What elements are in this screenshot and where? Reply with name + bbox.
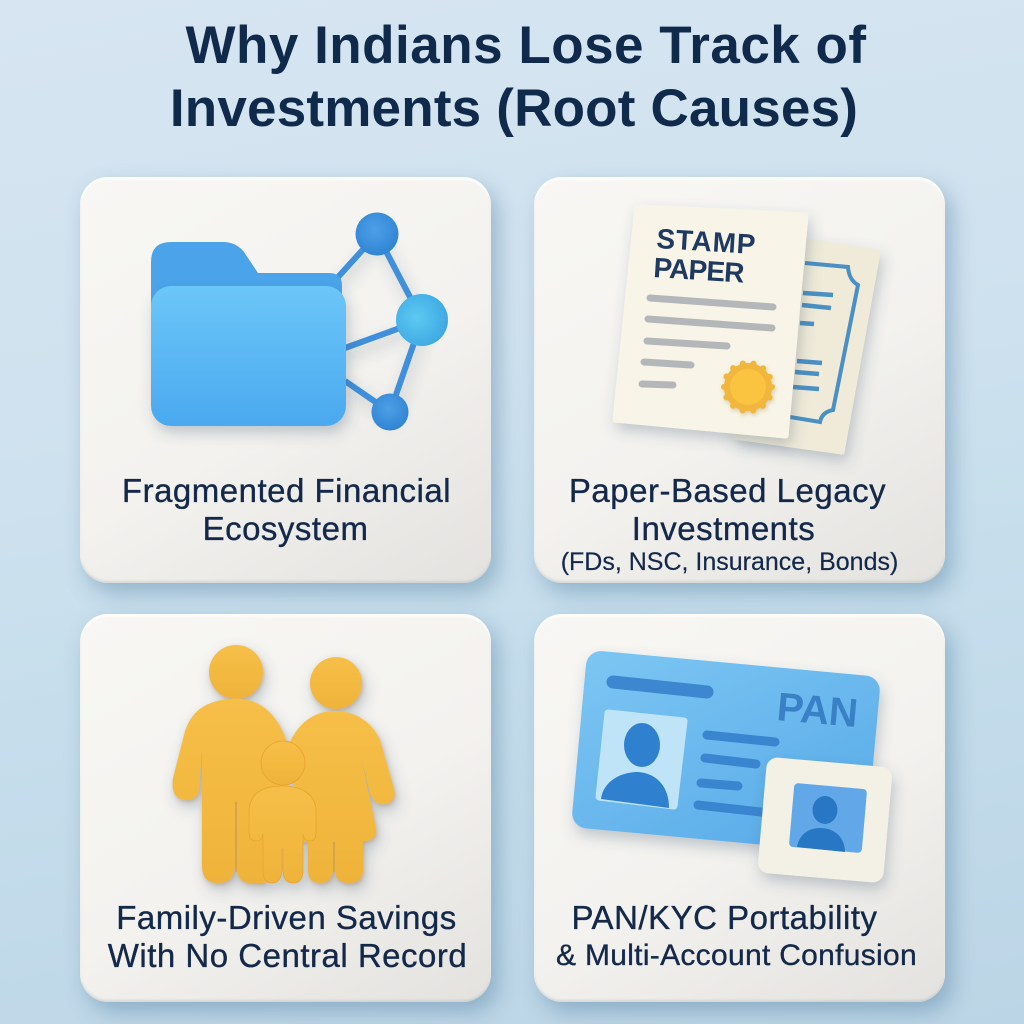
icon: stamp paper documents [615,207,878,452]
title [170,16,867,138]
title: Why Indians Lose Track of [185,16,867,75]
stamp paper label: PAPER [653,252,745,289]
caption: paper: Investments [632,510,815,547]
caption: fragmented [122,472,451,548]
icon: PAN card [571,650,893,883]
caption: family: Family-Driven Savings [116,899,457,936]
icon: folder network [151,212,448,430]
caption: fragmented: Ecosystem [203,510,368,547]
caption: family [108,899,467,974]
panel: family savings [80,614,491,1002]
PAN label: PAN [775,685,860,736]
stamp paper label: STAMP [656,223,756,260]
caption: family: With No Central Record [108,937,467,974]
panel: paper legacy [534,177,945,583]
title: Investments (Root Causes) [170,79,858,138]
icon: family [173,645,395,883]
caption: pan [556,899,917,972]
panel: PAN KYC [534,614,945,1002]
panel: fragmented ecosystem [80,177,491,583]
caption: pan: PAN/KYC Portability [572,899,877,936]
caption: fragmented: Fragmented Financial [122,472,451,509]
caption: paper [561,472,898,576]
caption: pan: & Multi-Account Confusion [556,939,917,972]
caption: paper: Paper-Based Legacy [569,472,886,509]
stamp paper label [653,223,756,289]
caption: paper: (FDs, NSC, Insurance, Bonds) [561,548,898,576]
